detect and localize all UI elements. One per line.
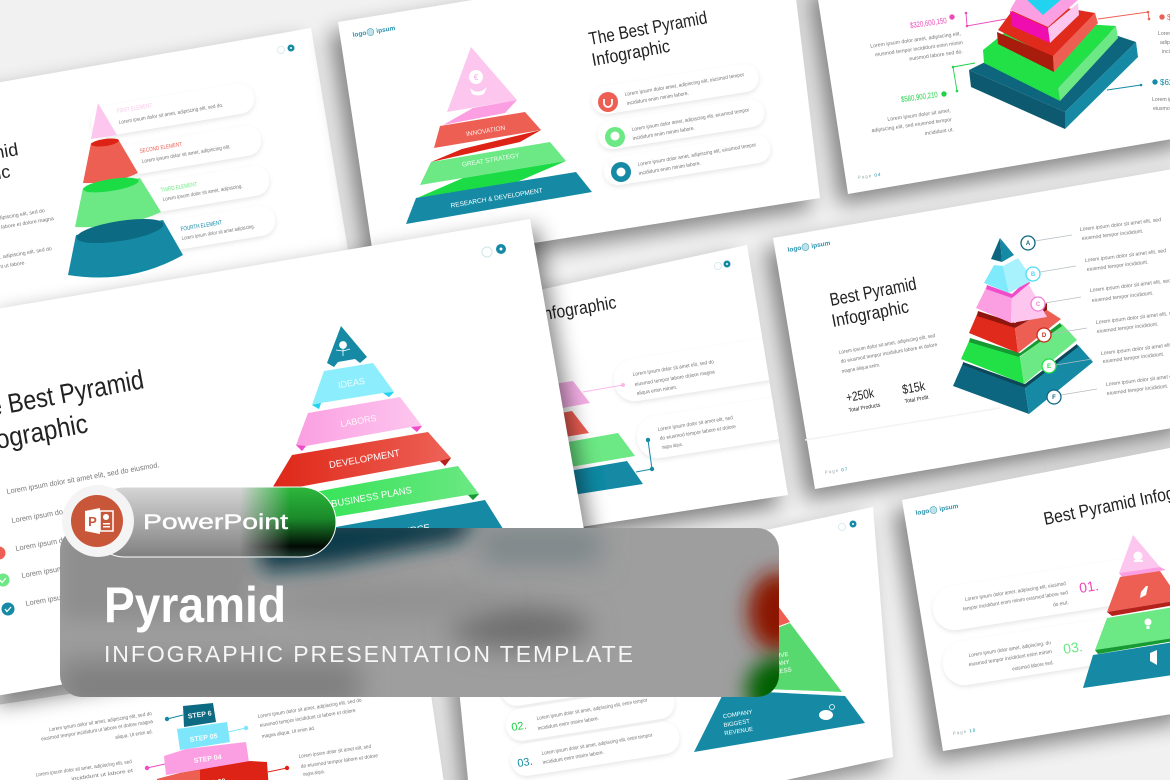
ribbon labels: LABORS — [340, 413, 377, 429]
list text: incididunt enim minim labore. — [638, 161, 701, 177]
step descriptions: Lorem ipsum dolor sit amet, adipiscing elit, sed do — [257, 698, 362, 720]
list items: Lorem ipsum do — [21, 562, 74, 580]
list pills — [590, 62, 772, 187]
segmented pyramid — [694, 600, 865, 752]
pagination dots — [838, 520, 856, 530]
step descriptions: eiusmod tempor incididunt ut labore et dolore — [259, 708, 356, 729]
pyramid labels: BIGGEST — [723, 719, 751, 729]
callout: pink value: eiusmod tempor incididunt enim minim — [875, 40, 963, 58]
list items: Lorem ipsum do — [11, 507, 64, 525]
pill text: Lorem ipsum dolor sit amet, adipiscing elit, enim tempor — [541, 733, 653, 757]
step descriptions: Lorem ipsum dolor sit amet, adipiscing elit, sed — [35, 759, 132, 778]
panel: large ribbon pyramid slide left — [0, 219, 602, 705]
list text: incididunt enim minim labore. — [632, 126, 695, 142]
panel: slide step pyramid bottom-left — [0, 640, 445, 780]
lettered descriptions: Lorem ipsum dolor sit amet elit, sed — [1080, 217, 1162, 233]
letter markers: A — [1026, 241, 1031, 247]
lettered descriptions: eiusmod tempor incididunt. — [1092, 290, 1154, 304]
step descriptions: aliqua. Ut enim ad. — [115, 729, 153, 741]
letter markers — [1021, 236, 1061, 404]
ribbon labels: BUSINESS PLANS — [330, 485, 413, 510]
pagination dots — [278, 44, 294, 54]
pill text: incididunt enim minim labore. — [542, 750, 604, 766]
panel: slide segmented pyramid bottom-center — [441, 507, 893, 780]
body text: do eiusmod tempor incididunt labore et dolore — [840, 342, 938, 365]
callout: right fragments — [1152, 13, 1170, 112]
callout: green value: adipiscing elit, sed eiusmod tempor — [871, 117, 953, 134]
list items — [0, 507, 78, 616]
list text: incididunt enim minim labore. — [626, 91, 689, 107]
body text fragment — [0, 208, 54, 273]
connectors — [583, 383, 654, 472]
numbers — [511, 720, 534, 770]
title — [828, 274, 918, 331]
element labels: SECOND ELEMENT — [139, 142, 183, 155]
pyramid labels: REVENUE — [724, 727, 754, 737]
stats: Total Profit — [904, 395, 929, 405]
pill text: eiusmod tempor incididunt enim minim — [968, 649, 1052, 668]
icon: euro coin and hand — [469, 70, 487, 96]
page number: Page 04 — [857, 172, 882, 180]
title — [0, 364, 146, 460]
lettered descriptions: eiusmod tempor incididunt. — [1087, 259, 1149, 273]
letter markers: B — [1031, 272, 1036, 278]
ribbon labels — [450, 125, 543, 210]
banner: glass title card — [60, 528, 779, 697]
callout lines — [952, 11, 1150, 92]
list text — [624, 72, 757, 177]
pill text: do eiut. — [1053, 600, 1069, 608]
pill text: magna aliqua. — [661, 442, 683, 451]
pyramid labels: COMPANY — [723, 710, 753, 720]
step labels: STEP 6 — [187, 710, 212, 721]
pyramid labels: POSITIVE — [761, 652, 789, 662]
pill background — [113, 488, 336, 556]
panel: slide cone pyramid top-left — [0, 28, 348, 323]
callout: green value: $580,900,210 — [900, 90, 939, 104]
pills — [930, 556, 1159, 688]
step descriptions — [35, 698, 379, 780]
title: Infographic — [590, 36, 671, 70]
icon: hub — [336, 342, 350, 356]
list text: Lorem ipsum dolor amet, adipiscing elit, eiusmod tempor — [637, 142, 757, 168]
step pyramid — [157, 703, 269, 780]
icon: PowerPoint logo: P — [88, 514, 97, 529]
element labels: FOURTH ELEMENT — [180, 220, 223, 233]
callout: green value: incididunt ut. — [925, 127, 954, 137]
ribbon labels: INNOVATION — [466, 125, 506, 138]
pills — [499, 650, 682, 778]
pill text: aliqua enim minim. — [636, 385, 678, 397]
element labels: Lorem ipsum dolor sit amet, adipiscing elit. — [141, 144, 231, 165]
badge label: PowerPoint — [143, 511, 288, 534]
panel: slide big-metric pyramid top-right — [806, 0, 1170, 205]
step descriptions: do eiusmod tempor labore et dolore — [300, 753, 379, 770]
callout: green value: Lorem ipsum dolor sit amet, — [887, 108, 951, 123]
intro text: Lorem ipsum dolor sit amet elit, sed do eiusmod. — [6, 460, 160, 496]
logo: logo — [787, 245, 802, 254]
pagination dots — [482, 244, 506, 257]
ribbon labels: DEVELOPMENT — [328, 448, 401, 471]
pill text: tempor incididunt enim minim euismod labore sed — [963, 590, 1068, 613]
numbers: 03. — [517, 756, 534, 770]
numbers — [1062, 577, 1100, 657]
icon: piggy bank — [819, 704, 834, 720]
element labels: THIRD ELEMENT — [160, 182, 198, 194]
pyramid labels: PROGRESS — [758, 667, 792, 679]
title fragment — [0, 139, 20, 196]
logo: logo — [915, 508, 930, 517]
lettered descriptions — [1080, 217, 1170, 397]
lettered descriptions: eiusmod tempor incididunt. — [1097, 321, 1159, 335]
list text: Lorem ipsum dolor amet, adipiscing elit, eiusmod tempor — [624, 72, 745, 98]
element labels: Lorem ipsum dolor sit amet, adipiscing. — [162, 184, 243, 203]
icons in pyramid — [1134, 552, 1157, 665]
pill text: Lorem ipsum dolor amet, adipiscing, du — [968, 640, 1051, 659]
letter markers: C — [1036, 302, 1041, 308]
lettered descriptions: eiusmod tempor incididunt. — [1103, 351, 1165, 365]
panel: slide icon pyramid bottom-right — [893, 444, 1170, 762]
logo — [915, 502, 959, 517]
step descriptions: magna aliqua. Ut enim ad. — [261, 726, 316, 740]
step descriptions: magna aliqua. — [302, 769, 325, 778]
logo: logo — [352, 30, 367, 39]
callout: right fragments: eiusmo — [1153, 106, 1170, 112]
callout: pink value: $320,600,150 — [909, 16, 948, 30]
pill text: Lorem ipsum dolor sit amet elit, sed — [657, 415, 733, 433]
step descriptions: Lorem ipsum dolor sit amet, adipiscing elit, sed do — [49, 711, 152, 733]
heading: Pyramid — [104, 577, 286, 633]
ribbon pyramid — [230, 326, 515, 552]
letter markers: F — [1052, 395, 1056, 401]
panel: slide ribbon pyramid top-center — [329, 0, 820, 279]
pyramid labels: COMPANY — [760, 660, 790, 670]
lettered descriptions: eiusmod tempor incididunt. — [1082, 228, 1144, 242]
pill text: incididunt enim minim labore. — [537, 716, 599, 732]
pill text — [963, 581, 1069, 673]
logo: ipsum — [939, 503, 959, 513]
3D sliced pyramid — [953, 238, 1093, 414]
numbers: 01. — [1078, 577, 1100, 596]
badge: PowerPoint pill — [62, 485, 336, 557]
pill text: eiusmod tempor labore dolore magna — [634, 369, 715, 388]
logo: ipsum — [376, 25, 396, 35]
frosted background — [60, 528, 779, 697]
list items: Lorem ipsum do — [15, 535, 68, 553]
lettered descriptions: eiusmod tempor incididunt. — [1107, 383, 1169, 397]
letter markers: D — [1042, 333, 1047, 339]
leader lines — [1035, 235, 1097, 395]
pill text — [536, 698, 653, 766]
step labels — [187, 710, 226, 780]
element labels — [116, 103, 255, 242]
list text: Lorem ipsum dolor amet, adipiscing elit, eiusmod tempor — [631, 107, 750, 133]
step descriptions: Lorem ipsum dolor sit amet elit, sed — [298, 744, 372, 760]
lettered descriptions: Lorem ipsum dolor sit amet elit, sed — [1090, 278, 1170, 294]
ribbon labels — [328, 376, 431, 543]
ribbon labels: RESEARCH & DEVELOPMENT — [450, 187, 543, 210]
lettered descriptions: Lorem ipsum dolor sit amet elit, sed — [1085, 248, 1167, 264]
list items: Lorem ipsum do — [25, 590, 78, 608]
list icons — [598, 92, 631, 182]
page number: Page 07 — [824, 466, 849, 475]
step descriptions: eiusmod tempor incididunt ut labore et dolore magna — [41, 719, 153, 743]
title fragment: Infographic — [537, 292, 618, 325]
element labels: FIRST ELEMENT — [116, 103, 153, 115]
letter markers: E — [1047, 364, 1051, 370]
element labels: Lorem ipsum dolor sit amet, adipiscing elit, sed do. — [118, 103, 224, 126]
callout: pink value: euismod labore sed do. — [909, 49, 963, 62]
folded ribbon pyramid — [406, 47, 592, 224]
stats: $15k — [901, 378, 927, 397]
pill text: Lorem ipsum dolor amet, adipiscing elit, eiusmod — [965, 581, 1066, 603]
title: Best Pyramid — [828, 274, 918, 310]
pyramid labels — [723, 652, 792, 737]
pill text — [632, 359, 736, 451]
pill text: Lorem ipsum dolor sit amet elit, sed do — [632, 359, 714, 378]
pill text: euismod labore sed. — [1012, 660, 1054, 673]
logo — [352, 24, 396, 39]
pagination dots — [714, 260, 730, 270]
ribbon labels: IDEAS — [337, 376, 366, 390]
panel: slide 3D lettered pyramid middle-right — [764, 166, 1170, 500]
icon: euro coin and hand: € — [474, 73, 479, 82]
logo — [787, 239, 831, 254]
title: Infographic — [830, 296, 910, 331]
page number: Page 10 — [952, 727, 977, 736]
callout: right fragments: adip — [1160, 40, 1170, 46]
element labels: Lorem ipsum dolor sit amet adipiscing. — [181, 224, 255, 242]
stats — [845, 378, 929, 414]
ribbon labels: RESOURCE — [376, 522, 431, 543]
3D stepped pyramid — [969, 0, 1138, 129]
pills — [614, 340, 779, 461]
callout: pink value — [870, 14, 963, 62]
title — [587, 7, 709, 70]
step labels: STEP 04 — [193, 754, 222, 765]
panel: slide stacked pyramid center — [542, 244, 791, 528]
body text — [838, 333, 938, 375]
element pills — [89, 82, 277, 260]
callout: pink value: Lorem ipsum dolor amet, adipiscing elit, — [870, 31, 961, 50]
step labels: STEP 05 — [189, 733, 218, 744]
callout: green value — [871, 90, 954, 137]
stats: Total Products — [848, 402, 881, 414]
stats: +250k — [845, 385, 875, 405]
body text: Lorem ipsum dolor sit amet, adipiscing elit, sed — [838, 333, 936, 356]
subheading: INFOGRAPHIC PRESENTATION TEMPLATE — [104, 641, 633, 667]
stacked pyramid — [540, 381, 643, 500]
title: The Best Pyramid — [587, 7, 709, 49]
body text: magna aliqua enim. — [841, 362, 881, 375]
numbers: 02. — [511, 720, 528, 734]
icon: PowerPoint logo — [62, 485, 134, 557]
icon pyramid — [1083, 535, 1170, 688]
cone pyramid — [68, 103, 183, 278]
pill text: do eiusmod tempor labore et dolore — [659, 424, 736, 442]
ribbon labels: GREAT STRATEGY — [461, 152, 521, 169]
pill text: Lorem ipsum dolor sit amet, adipiscing elit, enim tempor — [536, 698, 648, 722]
numbers: 03. — [1062, 638, 1084, 657]
logo: ipsum — [811, 240, 831, 250]
connectors — [145, 715, 289, 772]
